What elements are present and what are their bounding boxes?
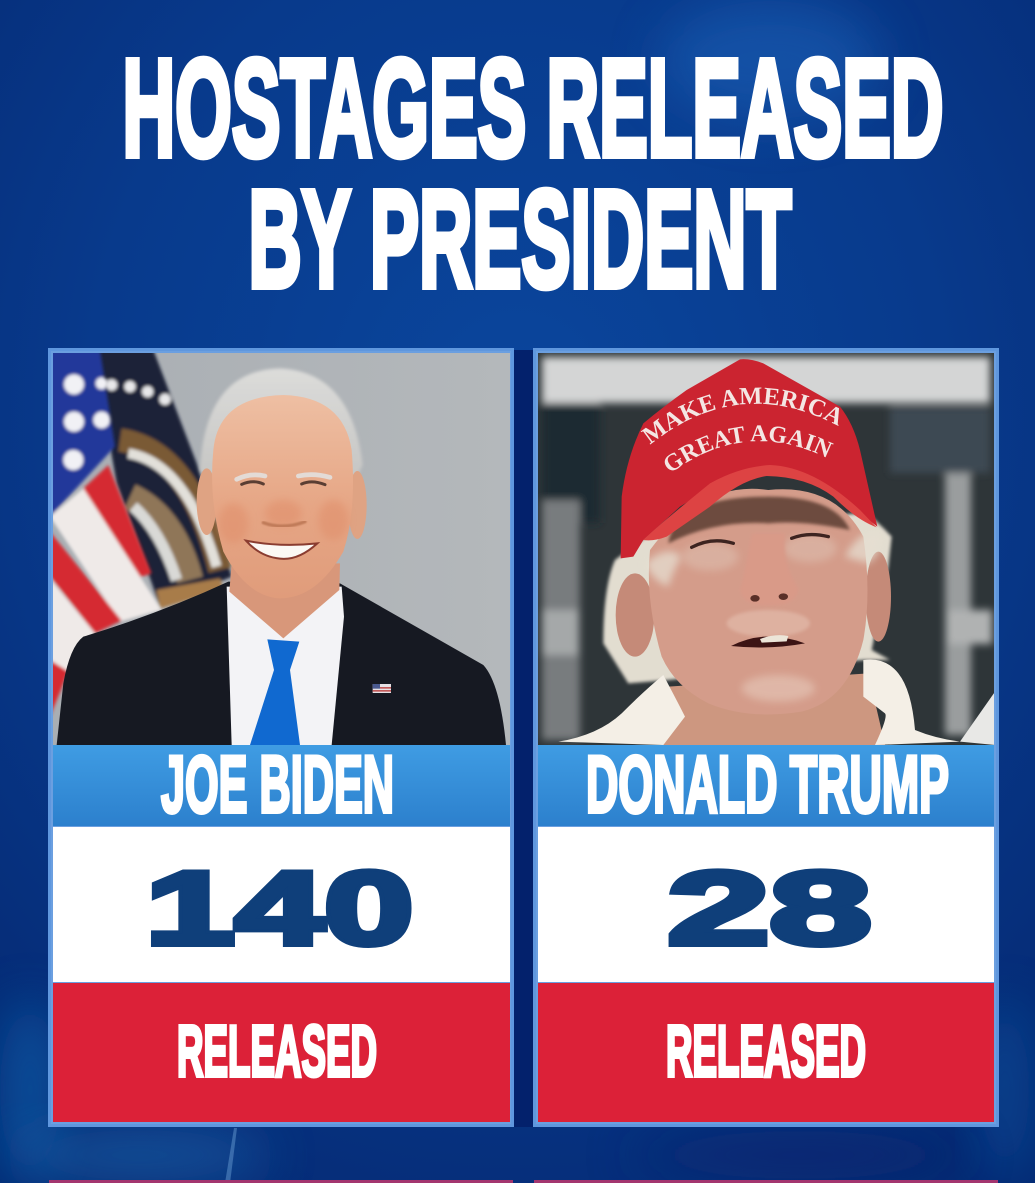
count box [53, 827, 510, 982]
released band [53, 983, 510, 1122]
eye pouches [682, 534, 837, 571]
face [212, 395, 353, 598]
cheeks [218, 500, 348, 543]
eyes and brows [237, 475, 330, 526]
right background shirt [960, 692, 995, 745]
number: 140 [146, 851, 414, 967]
cap text: MAKE AMERICA [640, 388, 839, 444]
head [649, 489, 867, 714]
panel: Donald Trump [533, 348, 999, 1127]
count box [538, 827, 994, 982]
nose [782, 549, 784, 551]
mouth [731, 636, 805, 647]
flag pin [373, 684, 391, 693]
hair [603, 513, 892, 683]
shirt [227, 587, 344, 745]
photo: Donald Trump portrait [538, 353, 994, 745]
cap text second line: GREAT AGAIN [664, 425, 834, 470]
eyes [692, 535, 828, 547]
neck [663, 673, 885, 745]
smile [246, 541, 317, 559]
collar [558, 659, 960, 745]
cap brim [643, 465, 877, 540]
cap [620, 359, 878, 558]
title [122, 32, 944, 316]
chin highlight [742, 675, 815, 702]
teeth [760, 635, 788, 643]
name band [53, 745, 510, 826]
upper lip [727, 610, 810, 637]
hairline shadow [668, 497, 850, 543]
nostrils [750, 593, 788, 602]
photo: Joe Biden portrait [50, 350, 510, 745]
released label: RELEASED [177, 1012, 377, 1092]
ears [197, 468, 367, 539]
next row: cropped card tops [49, 1180, 998, 1183]
released band [538, 983, 994, 1122]
tie [250, 639, 300, 745]
panel: Joe Biden [50, 350, 512, 1126]
US flag [50, 350, 162, 717]
hair [200, 368, 363, 487]
name: JOE BIDEN [161, 740, 394, 830]
suit [57, 582, 506, 745]
side hair [645, 530, 882, 587]
neck [229, 563, 340, 638]
name band [538, 745, 994, 826]
presidential flag [93, 350, 232, 608]
ears [616, 552, 891, 657]
number: 28 [668, 851, 872, 967]
